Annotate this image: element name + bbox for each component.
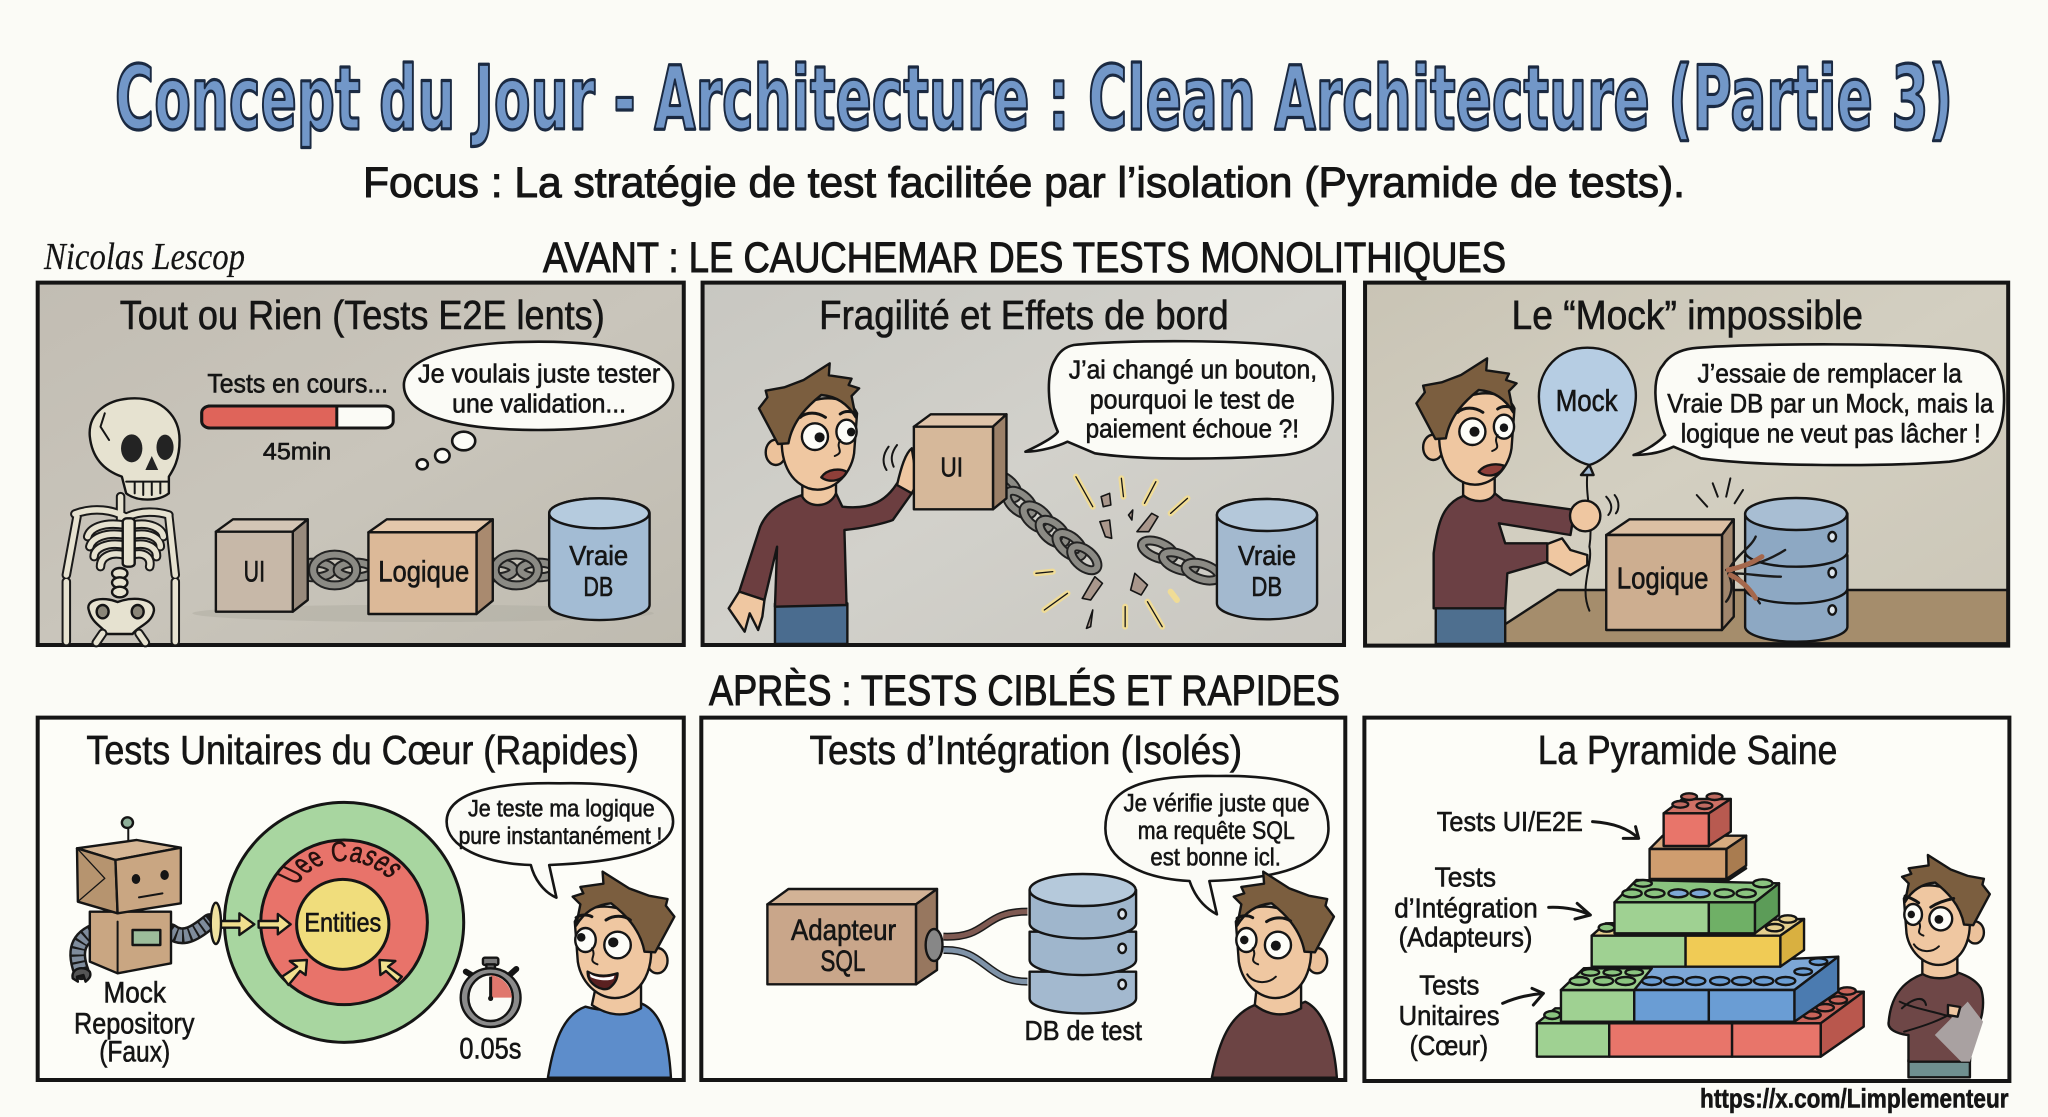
balloon	[1539, 348, 1636, 611]
tangled roots	[1697, 478, 1785, 603]
test database	[1025, 874, 1142, 1046]
speech bubble: ma requête SQL	[1138, 817, 1295, 845]
label: tests d'intégration: Tests	[1435, 861, 1496, 893]
speech bubble: Je vérifie juste que	[1123, 790, 1310, 818]
panel heading: Fragilité et Effets de bord	[819, 292, 1229, 338]
stopwatch	[459, 958, 521, 1065]
database stack	[1745, 498, 1847, 642]
concentric architecture circles	[223, 800, 466, 1044]
chained blocks: UI	[244, 556, 265, 589]
panel: la pyramide saine	[1364, 718, 2009, 1114]
proud man	[1889, 855, 1990, 1077]
happy man	[548, 872, 674, 1078]
speech bubble	[1025, 341, 1333, 459]
thought bubble	[404, 342, 673, 469]
mock robot: (Faux)	[99, 1036, 170, 1069]
chained blocks: Logique	[378, 556, 469, 589]
cables	[926, 912, 1028, 982]
panel: mock impossible	[1365, 283, 2008, 646]
heading: après: APRÈS : TESTS CIBLÉS ET RAPIDES	[709, 667, 1340, 715]
speech bubble: J’ai changé un bouton,	[1069, 356, 1317, 384]
speech bubble: Je teste ma logique	[468, 795, 655, 822]
progress bar: 45min	[263, 438, 331, 465]
balloon: Mock	[1556, 384, 1618, 418]
label: tests unitaires	[1399, 969, 1543, 1061]
subtitle: Focus : La stratégie de test facilitée par l’isolation (Pyramide de tests).	[363, 159, 1685, 207]
thought bubble: une validation...	[452, 390, 626, 419]
worried man	[1416, 358, 1587, 644]
broken chain	[986, 471, 1222, 584]
shards and sparks	[1036, 477, 1187, 628]
worried man	[729, 363, 924, 644]
panel: tests d'intégration	[701, 718, 1345, 1080]
red brick	[1664, 793, 1731, 846]
logique block	[1606, 519, 1734, 630]
speech bubble: pourquoi le test de	[1090, 386, 1295, 414]
logique block: Logique	[1617, 561, 1709, 595]
adapter block: Adapteur	[791, 914, 896, 947]
heading: avant: AVANT : LE CAUCHEMAR DES TESTS MONOLITHIQUES	[543, 234, 1506, 282]
chained blocks: DB	[583, 571, 613, 602]
UI block: UI	[940, 451, 963, 483]
author signature: Nicolas Lescop	[43, 236, 245, 278]
stopwatch: 0.05s	[459, 1032, 521, 1065]
panel heading: Tout ou Rien (Tests E2E lents)	[120, 292, 605, 338]
database cylinder	[1217, 499, 1317, 619]
adapter block	[767, 889, 937, 984]
table	[1476, 590, 2007, 643]
panel heading: Le “Mock” impossible	[1512, 292, 1863, 338]
label: tests d'intégration: (Adapteurs)	[1399, 921, 1532, 953]
speech bubble	[1634, 344, 2004, 465]
skeleton	[66, 398, 180, 643]
chained blocks	[216, 498, 650, 620]
speech bubble: paiement échoue ?!	[1086, 415, 1299, 444]
concentric architecture circles: Uee Cases	[276, 842, 401, 882]
panel: tests unitaires	[36, 716, 686, 1082]
label: tests unitaires: Tests	[1419, 969, 1479, 1000]
chained blocks: Vraie	[569, 540, 628, 571]
label: tests unitaires: Unitaires	[1399, 999, 1500, 1031]
brick pyramid	[1537, 793, 1864, 1057]
yellow row	[1592, 915, 1804, 967]
speech bubble	[447, 783, 673, 898]
mock robot: Repository	[74, 1007, 195, 1040]
bottom row	[1537, 987, 1864, 1057]
speech bubble	[1105, 776, 1328, 914]
mock robot: Mock	[103, 976, 166, 1009]
label: tests d'intégration: d’Intégration	[1394, 892, 1538, 924]
blue row	[1561, 957, 1838, 1022]
green row	[1614, 879, 1779, 933]
concentric architecture circles: Entities	[304, 908, 381, 938]
thought bubble: Je voulais juste tester	[418, 360, 660, 389]
label: tests d'intégration	[1394, 861, 1590, 953]
speech bubble: est bonne icl.	[1150, 844, 1281, 872]
test arrows	[211, 903, 402, 985]
adapter block: SQL	[820, 945, 865, 978]
progress bar	[202, 368, 393, 465]
panel heading: La Pyramide Saine	[1538, 727, 1837, 773]
panel heading: Tests Unitaires du Cœur (Rapides)	[86, 727, 639, 773]
UI block	[914, 414, 1006, 509]
panel: tout ou rien	[38, 283, 684, 645]
database cylinder: Vraie	[1238, 540, 1296, 571]
smiling man	[1212, 872, 1337, 1078]
speech bubble: pure instantanément !	[459, 822, 662, 849]
panel: fragilité	[703, 283, 1344, 645]
panel heading: Tests d’Intégration (Isolés)	[809, 727, 1242, 773]
label: tests UI: Tests UI/E2E	[1437, 805, 1583, 837]
database cylinder: DB	[1251, 571, 1282, 602]
mock robot	[72, 817, 209, 1069]
brown brick	[1650, 836, 1746, 880]
test database: DB de test	[1025, 1015, 1142, 1046]
label: tests unitaires: (Cœur)	[1410, 1029, 1488, 1061]
progress bar: Tests en cours...	[207, 368, 388, 399]
